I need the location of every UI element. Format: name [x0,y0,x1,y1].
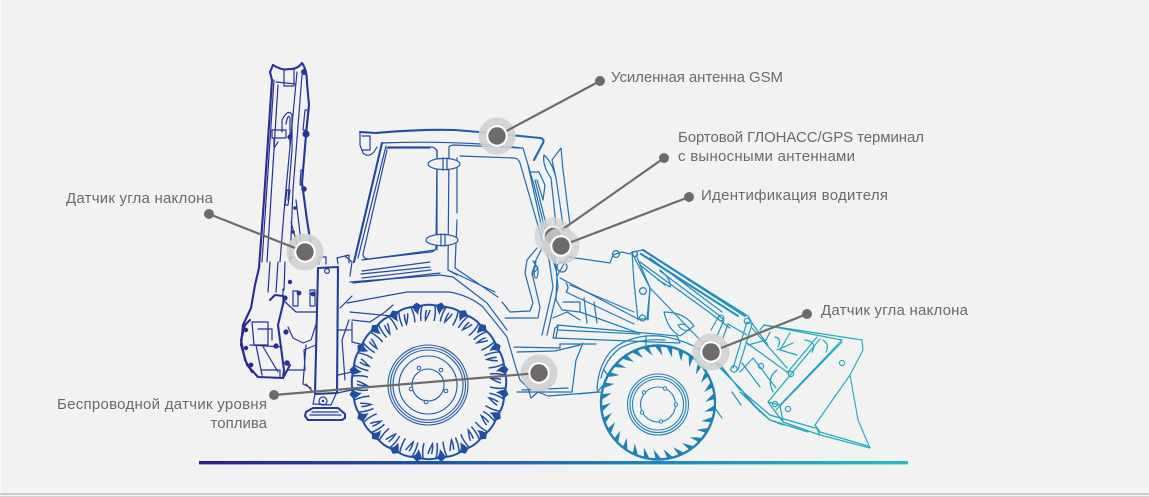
body and fenders [340,275,815,428]
front bucket [740,325,870,448]
stabilizer leg and foot [305,255,352,420]
callout: GLONASS/GPS terminal [534,129,924,254]
exhaust stack [544,148,570,225]
callout: GLONASS/GPS terminal: Бортовой ГЛОНАСС/GPS терминал [678,129,924,146]
callout: wireless fuel level sensor: топлива [211,415,268,432]
ground line [199,461,908,464]
callout: driver identification: Идентификация водителя [701,187,888,204]
cab [353,130,558,335]
callout: wireless fuel level sensor [57,354,558,432]
callout: GLONASS/GPS terminal: с выносными антеннами [678,148,855,165]
callout: tilt sensor, loader: Датчик угла наклона [821,302,969,319]
callout: tilt sensor, boom: Датчик угла наклона [66,190,214,207]
callout: driver identification [542,187,888,264]
callout: GSM antenna [478,69,783,154]
front loader arms [553,250,768,390]
rear backhoe boom [241,63,313,378]
rear bucket and linkage [241,280,318,388]
front wheel [601,346,715,460]
callout: GSM antenna: Усиленная антенна GSM [611,69,783,86]
callout: tilt sensor, boom [66,190,324,270]
rear wheel [348,301,510,463]
callout: tilt sensor, loader [692,302,969,370]
backhoe loader illustration [241,63,870,463]
callout: wireless fuel level sensor: Беспроводной датчик уровня [57,396,267,413]
